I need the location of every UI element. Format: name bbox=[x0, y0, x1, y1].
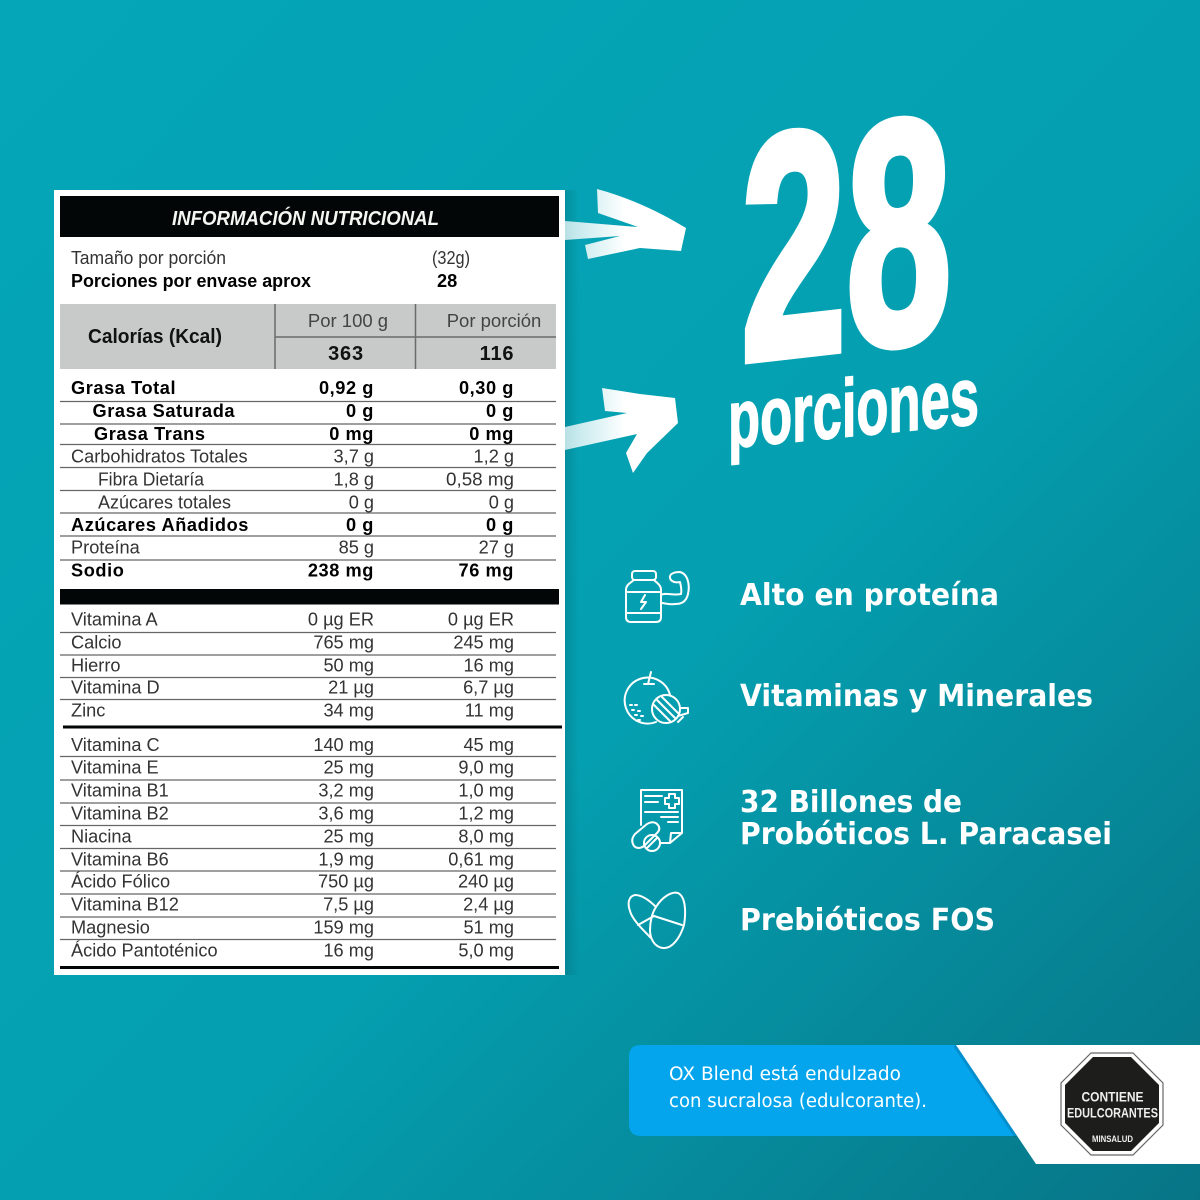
vitamin rows: Ácido Pantoténico bbox=[71, 940, 218, 960]
vitamin rows: 0,61 mg bbox=[448, 849, 514, 869]
macronutrient rows: 0 g bbox=[486, 401, 514, 421]
vitamin rows: Vitamina C bbox=[71, 735, 160, 755]
mineral rows: Vitamina D bbox=[71, 677, 160, 697]
vitamin rows: 140 mg bbox=[313, 735, 374, 755]
warning seal: contiene edulcorantes: CONTIENE bbox=[1082, 1088, 1144, 1104]
macronutrient rows: 0,92 g bbox=[319, 378, 374, 398]
vitamin rows: 1,9 mg bbox=[318, 849, 374, 869]
text: prebióticos fos: Prebióticos FOS bbox=[740, 903, 995, 938]
macronutrient rows: 0 g bbox=[489, 492, 514, 512]
macronutrient rows: Grasa Total bbox=[71, 378, 176, 398]
porciones label: porciones bbox=[728, 351, 979, 466]
vitamin rows: Vitamina E bbox=[71, 757, 159, 777]
vitamin rows: Vitamina B12 bbox=[71, 894, 179, 914]
mineral rows: 0 µg ER bbox=[308, 609, 374, 629]
macronutrient rows: Azúcares totales bbox=[98, 492, 231, 512]
vitamin rows: 3,2 mg bbox=[318, 780, 374, 800]
vitamin rows: 45 mg bbox=[463, 735, 514, 755]
text: 32 billones de probióticos bbox=[740, 785, 1112, 852]
vitamin rows: Vitamina B1 bbox=[71, 780, 169, 800]
icon: supplement jar and arm bbox=[626, 571, 689, 622]
macronutrient rows: 0 mg bbox=[469, 424, 514, 444]
text: 32 billones de probióticos: 32 Billones de bbox=[740, 785, 962, 820]
vitamin rows: 8,0 mg bbox=[458, 826, 514, 846]
macronutrient rows: 0,58 mg bbox=[446, 469, 514, 489]
feature: probiotics bbox=[632, 785, 1112, 852]
calories block: Por 100 g bbox=[308, 310, 388, 331]
vitamin rows: 240 µg bbox=[458, 871, 514, 891]
vitamin rows: 1,0 mg bbox=[458, 780, 514, 800]
macronutrient rows: Proteína bbox=[71, 537, 141, 557]
mineral rows: 34 mg bbox=[323, 700, 374, 720]
mineral rows bbox=[60, 609, 562, 728]
arrow: upper brush arrow bbox=[565, 189, 686, 259]
warning seal: contiene edulcorantes: MINSALUD bbox=[1092, 1134, 1133, 1144]
macronutrient rows: 27 g bbox=[479, 537, 514, 557]
macronutrient rows: 0,30 g bbox=[459, 378, 514, 398]
calories block: 116 bbox=[480, 343, 514, 365]
text: 32 billones de probióticos: Probóticos L. Paracasei bbox=[740, 817, 1112, 852]
mineral rows: 0 µg ER bbox=[448, 609, 514, 629]
vitamin rows: Magnesio bbox=[71, 917, 150, 937]
macronutrient rows bbox=[60, 378, 556, 580]
mineral rows: 245 mg bbox=[453, 632, 514, 652]
feature: vitamins and minerals bbox=[625, 672, 1093, 724]
vitamin rows: Vitamina B2 bbox=[71, 803, 169, 823]
callout: sweetener note bbox=[629, 1045, 1036, 1136]
serving size bbox=[71, 248, 470, 291]
macronutrient rows: 0 g bbox=[486, 515, 514, 535]
macronutrient rows: Grasa Saturada bbox=[92, 401, 235, 421]
mineral rows: 11 mg bbox=[465, 700, 514, 720]
black separator bar bbox=[60, 589, 559, 604]
callout: sweetener note: OX Blend está endulzado bbox=[669, 1064, 901, 1085]
vitamin rows bbox=[60, 735, 559, 969]
panel: nutrition table bbox=[54, 190, 579, 975]
serving size: Porciones por envase aprox bbox=[71, 271, 311, 291]
mineral rows: Hierro bbox=[71, 655, 121, 675]
macronutrient rows: 238 mg bbox=[308, 560, 374, 580]
vitamin rows: 750 µg bbox=[318, 871, 374, 891]
icon: document and pills bbox=[632, 790, 682, 851]
mineral rows: 16 mg bbox=[463, 655, 514, 675]
macronutrient rows: Carbohidratos Totales bbox=[71, 446, 248, 466]
white corner panel bbox=[956, 1045, 1200, 1164]
mineral rows: 21 µg bbox=[328, 677, 374, 697]
vitamin rows: 2,4 µg bbox=[463, 894, 514, 914]
macronutrient rows: Fibra Dietaría bbox=[98, 469, 205, 489]
vitamin rows: 1,2 mg bbox=[458, 803, 514, 823]
macronutrient rows: Sodio bbox=[71, 560, 124, 580]
mineral rows: 6,7 µg bbox=[463, 677, 514, 697]
macronutrient rows: Grasa Trans bbox=[94, 424, 206, 444]
big number 28: 28 bbox=[741, 49, 951, 428]
vitamin rows: 9,0 mg bbox=[458, 757, 514, 777]
feature: high protein bbox=[626, 571, 999, 622]
vitamin rows: Niacina bbox=[71, 826, 133, 846]
macronutrient rows: Azúcares Añadidos bbox=[71, 515, 249, 535]
vitamin rows: 5,0 mg bbox=[458, 940, 514, 960]
mineral rows: 50 mg bbox=[323, 655, 374, 675]
vitamin rows: Vitamina B6 bbox=[71, 849, 169, 869]
table header bbox=[60, 196, 559, 237]
text: vitaminas y minerales: Vitaminas y Minerales bbox=[740, 679, 1093, 714]
vitamin rows: 25 mg bbox=[323, 757, 374, 777]
vitamin rows: 159 mg bbox=[313, 917, 374, 937]
vitamin rows: 7,5 µg bbox=[323, 894, 374, 914]
arrow: lower brush arrow bbox=[565, 388, 678, 473]
warning seal: contiene edulcorantes bbox=[1061, 1053, 1163, 1155]
text: alto en proteína: Alto en proteína bbox=[740, 578, 999, 613]
vitamin rows: Ácido Fólico bbox=[71, 871, 170, 891]
warning seal: contiene edulcorantes: EDULCORANTES bbox=[1067, 1104, 1158, 1120]
serving size: 28 bbox=[437, 271, 457, 291]
icon: orange and pill bbox=[625, 672, 688, 724]
vitamin rows: 16 mg bbox=[323, 940, 374, 960]
vitamin rows: 25 mg bbox=[323, 826, 374, 846]
macronutrient rows: 85 g bbox=[339, 537, 374, 557]
calories block bbox=[60, 304, 556, 369]
callout: sweetener note: con sucralosa (edulcorante). bbox=[669, 1091, 927, 1112]
macronutrient rows: 0 mg bbox=[329, 424, 374, 444]
vitamin rows: 3,6 mg bbox=[318, 803, 374, 823]
calories block: Calorías (Kcal) bbox=[88, 326, 222, 348]
serving size: (32g) bbox=[432, 248, 470, 268]
icon: heart of capsules bbox=[629, 893, 685, 948]
table header: INFORMACIÓN NUTRICIONAL bbox=[172, 206, 439, 230]
serving size: Tamaño por porción bbox=[71, 248, 226, 268]
macronutrient rows: 1,8 g bbox=[334, 469, 374, 489]
macronutrient rows: 0 g bbox=[346, 515, 374, 535]
mineral rows: 765 mg bbox=[313, 632, 374, 652]
macronutrient rows: 76 mg bbox=[459, 560, 514, 580]
calories block: Por porción bbox=[447, 310, 541, 331]
mineral rows: Calcio bbox=[71, 632, 122, 652]
macronutrient rows: 0 g bbox=[349, 492, 374, 512]
macronutrient rows: 3,7 g bbox=[334, 446, 374, 466]
mineral rows: Vitamina A bbox=[71, 609, 158, 629]
calories block: 363 bbox=[328, 343, 364, 365]
vitamin rows: 51 mg bbox=[463, 917, 514, 937]
feature: prebiotics bbox=[629, 893, 995, 948]
mineral rows: Zinc bbox=[71, 700, 105, 720]
macronutrient rows: 1,2 g bbox=[474, 446, 514, 466]
macronutrient rows: 0 g bbox=[346, 401, 374, 421]
